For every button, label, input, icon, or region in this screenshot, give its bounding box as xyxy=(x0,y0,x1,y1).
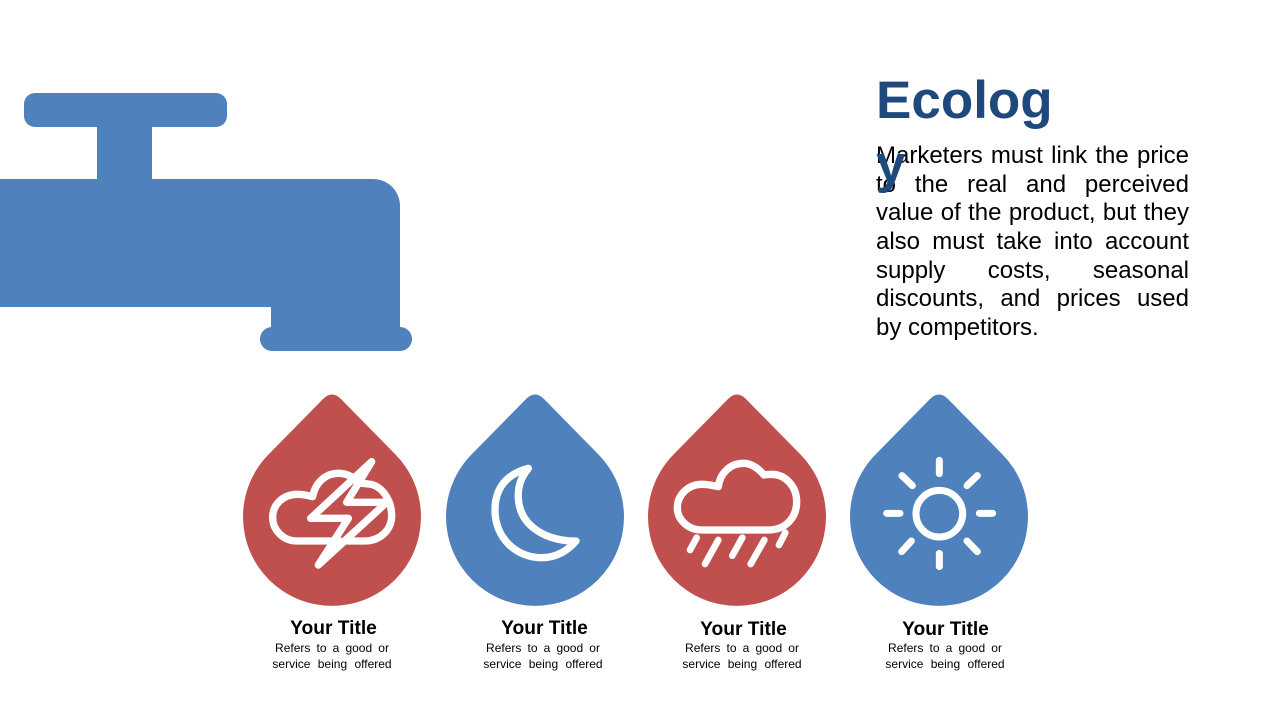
caption 3 xyxy=(682,619,802,671)
body text: value of the product, but they xyxy=(876,199,1189,226)
body text: supply costs, seasonal xyxy=(876,257,1189,284)
caption 4: service being offered xyxy=(885,657,1005,671)
body text: also must take into account xyxy=(876,228,1189,255)
drop: sun xyxy=(850,394,1028,606)
body text: discounts, and prices used xyxy=(876,285,1189,312)
caption 4: Your Title xyxy=(902,619,989,640)
caption 1: Refers to a good or xyxy=(275,641,389,655)
caption 2: Your Title xyxy=(501,618,588,639)
icon: crescent moon xyxy=(495,468,576,558)
body text: Marketers must link the price xyxy=(876,142,1189,169)
heading: Ecology xyxy=(876,71,1053,194)
icon: faucet xyxy=(0,93,412,351)
caption 3: service being offered xyxy=(682,657,802,671)
caption 4 xyxy=(885,619,1005,671)
body text: to the real and perceived xyxy=(876,171,1189,198)
drop: storm xyxy=(243,394,421,606)
icon: rain cloud xyxy=(677,463,797,564)
caption 3: Refers to a good or xyxy=(685,641,799,655)
caption 2: Refers to a good or xyxy=(486,641,600,655)
caption 4: Refers to a good or xyxy=(888,641,1002,655)
caption 2 xyxy=(483,618,603,671)
icon: cloud with lightning xyxy=(273,462,392,565)
caption 1: Your Title xyxy=(290,618,377,639)
body text: by competitors. xyxy=(876,314,1039,341)
caption 1: service being offered xyxy=(272,657,392,671)
caption 1 xyxy=(272,618,392,671)
caption 2: service being offered xyxy=(483,657,603,671)
drop: rain xyxy=(648,394,826,606)
drop: moon xyxy=(446,394,624,606)
icon: sun xyxy=(887,460,993,567)
body text xyxy=(876,142,1189,341)
caption 3: Your Title xyxy=(700,619,787,640)
